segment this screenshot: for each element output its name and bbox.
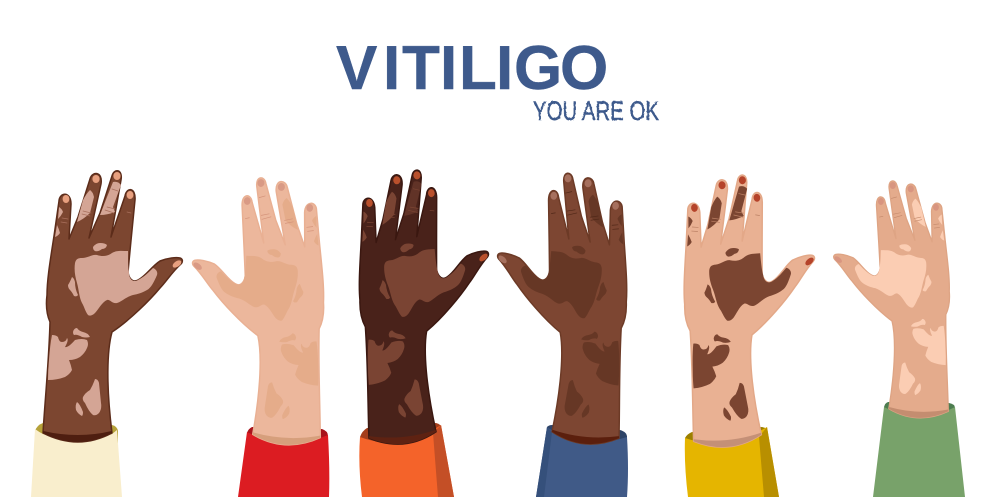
hand 6: tan hand with pale patches and green sleeve bbox=[828, 179, 965, 497]
hand 3: dark hand with orange sleeve bbox=[344, 164, 506, 497]
tan arm with dark patches bbox=[669, 169, 832, 450]
yellow sleeve bbox=[685, 427, 779, 497]
red sleeve bbox=[238, 427, 329, 497]
brown arm with vitiligo patches bbox=[43, 171, 183, 442]
hand 1: brown hand with cream sleeve bbox=[31, 171, 183, 497]
blue sleeve bbox=[536, 425, 628, 497]
hand 2: light hand with red sleeve bbox=[183, 175, 334, 497]
title: VITILIGO bbox=[336, 34, 608, 103]
light arm with patches bbox=[183, 175, 334, 446]
dark arm with patches bbox=[344, 164, 506, 447]
tan arm with pale patches bbox=[828, 179, 957, 419]
cream sleeve bbox=[31, 423, 122, 497]
green sleeve bbox=[873, 402, 965, 497]
hand 4: brown hand with blue sleeve bbox=[483, 167, 640, 497]
brown arm with darker patches bbox=[483, 167, 640, 447]
orange sleeve bbox=[359, 423, 454, 497]
subtitle: YOU ARE OK bbox=[533, 96, 659, 126]
hand 5: tan hand with dark patches and yellow sleeve bbox=[669, 169, 832, 497]
